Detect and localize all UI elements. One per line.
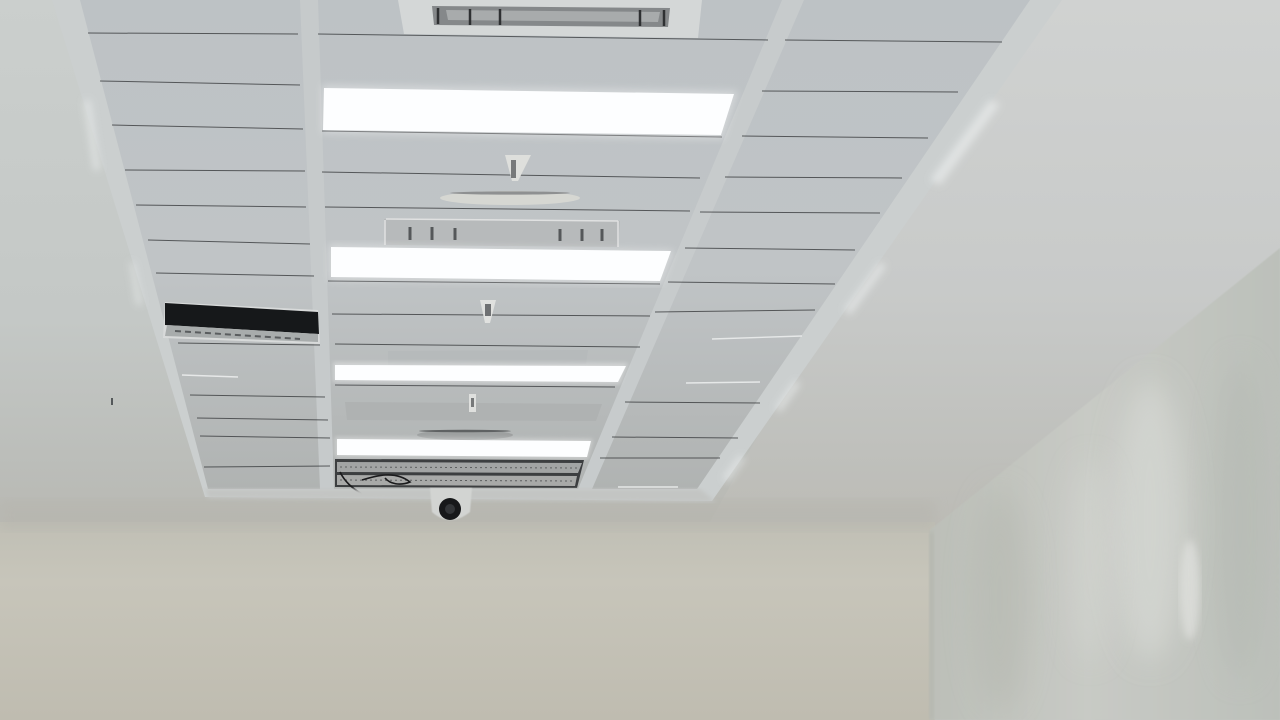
hanging cables (340, 472, 410, 494)
sprinkler 3 (469, 394, 476, 412)
right ceiling (700, 0, 1280, 540)
open ceiling hole (163, 302, 320, 344)
round diffuser 1 (440, 191, 580, 205)
round diffuser 2 (417, 430, 513, 440)
left ceiling (0, 0, 1280, 530)
top air vent (398, 0, 702, 38)
ceiling edge trim (205, 489, 716, 502)
side wall (929, 248, 1280, 720)
outer frame (52, 0, 1062, 501)
faint vent 3 (388, 350, 588, 365)
light slat gaps (182, 336, 802, 487)
LED panel 3 (333, 362, 628, 384)
faint vent 4 (345, 402, 602, 421)
LED panel 4 (335, 437, 593, 459)
grid rails (300, 0, 334, 489)
slat lines right (600, 40, 1002, 458)
LED panel 1 (322, 85, 738, 139)
wall speck (111, 398, 113, 405)
sprinkler 1 (505, 155, 531, 181)
frame highlights (84, 100, 1000, 482)
security camera dome (430, 488, 472, 520)
slat lines middle (318, 34, 768, 387)
tile field (80, 0, 1030, 489)
exposed LED fixture (335, 459, 584, 494)
LED panel 2 (329, 244, 674, 284)
middle air vent (384, 219, 620, 247)
slat lines left (88, 33, 330, 467)
shadow at ceiling-wall junction (0, 500, 935, 530)
sprinkler 2 (480, 300, 496, 323)
suspended ceiling (52, 0, 1062, 501)
back wall (0, 522, 935, 720)
